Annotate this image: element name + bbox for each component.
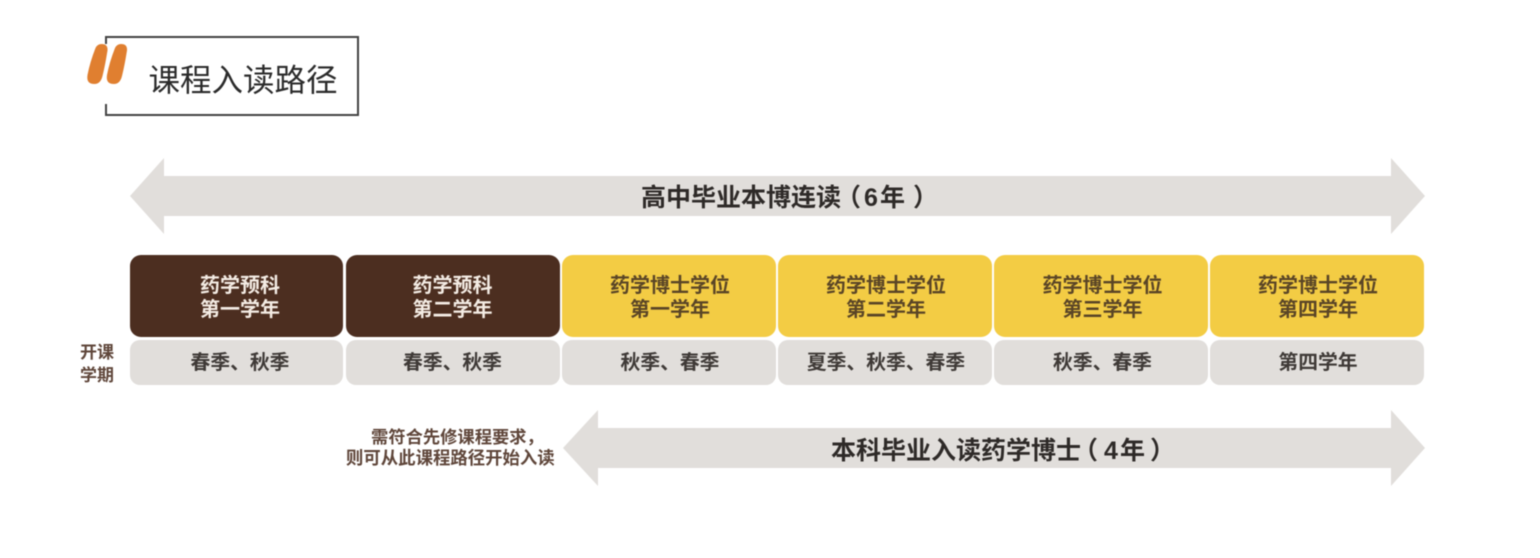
card: preparatory year 1 [130, 255, 343, 337]
card: doctorate year 3: 第三学年 [1062, 298, 1142, 321]
card: preparatory year 2: 第二学年 [412, 298, 492, 321]
intake term label: 学期 [80, 365, 114, 385]
term: doctorate year 1 [562, 340, 776, 385]
section heading: 课程入读路径: 课程入读路径 [148, 62, 338, 98]
term: doctorate year 4: 第四学年 [1278, 351, 1358, 374]
term: doctorate year 2 [778, 340, 992, 385]
arrow: bachelor entry to doctorate, 4 years: 4 [1104, 437, 1118, 465]
arrow: high school to doctorate, 6 years: ） [913, 184, 938, 212]
term: preparatory year 1 [130, 340, 343, 385]
term: preparatory year 1: 春季、秋季 [191, 351, 290, 374]
arrow: high school to doctorate, 6 years: （ [836, 184, 861, 212]
card: preparatory year 2: 药学预科 [412, 274, 492, 297]
term: doctorate year 3: 秋季、春季 [1053, 351, 1152, 374]
arrow: high school to doctorate, 6 years [130, 158, 1425, 234]
arrow: bachelor entry to doctorate, 4 years: 本科毕业入读药学博士 [831, 437, 1081, 465]
arrow: bachelor entry to doctorate, 4 years: 年 [1120, 437, 1145, 465]
arrow: high school to doctorate, 6 years: 6 [864, 184, 878, 212]
intake terms row [130, 340, 1424, 385]
card: doctorate year 2: 药学博士学位 [826, 273, 946, 297]
card: doctorate year 3 [994, 255, 1208, 337]
prerequisite note: 需符合先修课程要求， [371, 427, 544, 447]
term: doctorate year 1: 秋季、春季 [621, 351, 720, 374]
term: doctorate year 4 [1210, 340, 1424, 385]
term: doctorate year 3 [994, 340, 1208, 385]
card: preparatory year 2 [346, 255, 560, 337]
card: doctorate year 1 [562, 255, 776, 337]
arrow: high school to doctorate, 6 years: 高中毕业本博连读 [641, 184, 841, 212]
term: preparatory year 2 [346, 340, 560, 385]
arrow: bachelor entry to doctorate, 4 years [563, 410, 1425, 486]
card: preparatory year 1: 第一学年 [200, 298, 280, 321]
program cards row [130, 255, 1424, 337]
card: doctorate year 2: 第二学年 [846, 298, 926, 321]
prerequisite note [346, 427, 555, 468]
card: doctorate year 2 [778, 255, 992, 337]
card: doctorate year 4: 第四学年 [1278, 298, 1358, 321]
card: doctorate year 4 [1210, 255, 1424, 337]
card: doctorate year 1: 第一学年 [630, 298, 710, 321]
intake term label [80, 343, 114, 385]
intake term label: 开课 [80, 343, 114, 362]
arrow: high school to doctorate, 6 years: 年 [880, 184, 905, 212]
card: doctorate year 3: 药学博士学位 [1042, 273, 1162, 297]
arrow: bachelor entry to doctorate, 4 years: ） [1150, 437, 1175, 465]
section heading: 课程入读路径 [87, 37, 358, 115]
term: preparatory year 2: 春季、秋季 [403, 351, 502, 374]
prerequisite note: 则可从此课程路径开始入读 [346, 448, 555, 468]
icon: orange quote mark [87, 44, 127, 84]
card: doctorate year 1: 药学博士学位 [610, 273, 730, 297]
arrow: bachelor entry to doctorate, 4 years: （ [1073, 437, 1098, 465]
card: preparatory year 1: 药学预科 [200, 274, 280, 297]
card: doctorate year 4: 药学博士学位 [1258, 273, 1378, 297]
term: doctorate year 2: 夏季、秋季、春季 [807, 351, 965, 374]
